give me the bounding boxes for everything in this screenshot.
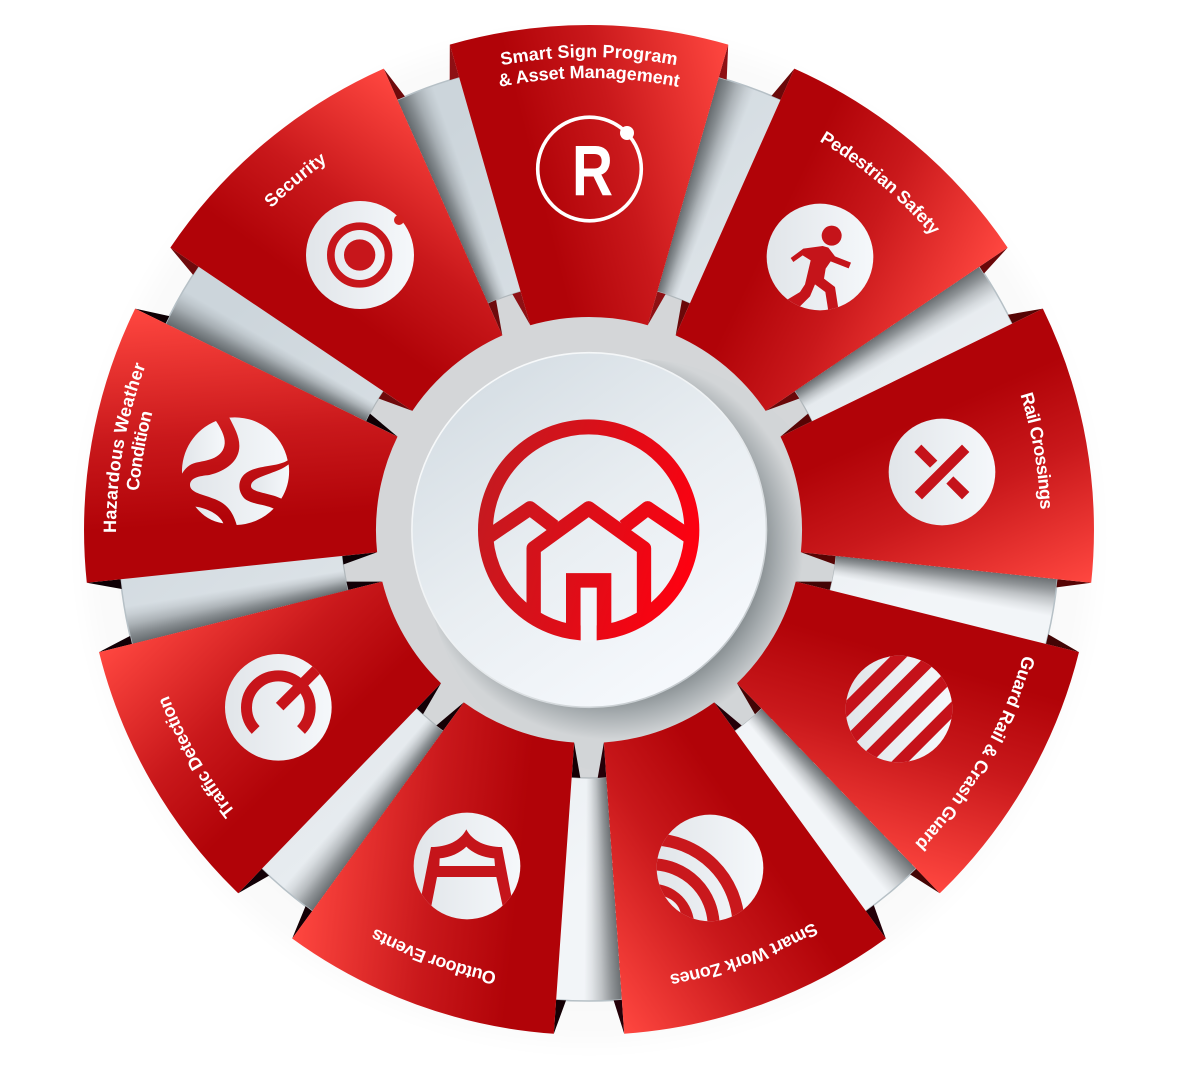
panel: Guard Rail & Crash Guard: Guard Rail & Crash Guard	[915, 657, 1034, 852]
panel: Security: Security	[265, 154, 325, 206]
centre disc	[412, 353, 766, 707]
panel: Rail Crossings: Rail Crossings	[1020, 392, 1051, 509]
icon: traffic gauge	[225, 654, 332, 761]
panel: Smart Work Zones: Smart Work Zones	[670, 924, 818, 984]
icon: hazardous weather winding road	[182, 417, 289, 525]
panel: Security	[170, 68, 502, 411]
panel: Outdoor Events: Outdoor Events	[372, 930, 495, 984]
panel: Smart Work Zones	[598, 702, 886, 1034]
icon: registered R sign: R	[572, 131, 613, 210]
panel: Rail Crossings	[780, 308, 1094, 588]
grey hub with spokes	[118, 59, 1060, 1001]
panel: Outdoor Events	[292, 702, 580, 1034]
icon: rail crossing	[889, 419, 995, 525]
panel: Pedestrian Safety: Pedestrian Safety	[820, 131, 940, 234]
panel: Pedestrian Safety	[676, 68, 1008, 411]
icon: registered R sign	[538, 117, 641, 221]
icon: pedestrian	[767, 204, 873, 311]
icon: guard rail stripes	[846, 656, 952, 762]
panel: Guard Rail & Crash Guard	[737, 582, 1079, 894]
folded grey strips between panels	[118, 59, 1060, 1001]
panel: Hazardous Weather Condition: Hazardous Weather	[104, 362, 144, 532]
panel: Hazardous Weather Condition: Condition	[126, 412, 152, 490]
centre disc drop shadow	[435, 360, 834, 736]
panel: Smart Sign Program & Asset Management: & Asset Management	[500, 66, 680, 87]
panel: Traffic Detection: Traffic Detection	[160, 696, 233, 820]
icon: work zone signal arcs	[656, 814, 764, 922]
icon: security target	[306, 201, 414, 309]
panel: Traffic Detection	[99, 582, 441, 894]
icon: event tent	[414, 813, 520, 919]
panel: Smart Sign Program & Asset Management	[450, 25, 728, 326]
panel: Hazardous Weather Condition	[84, 308, 398, 589]
centre logo: houses in a circle	[485, 427, 692, 643]
panel: Smart Sign Program & Asset Management: Smart Sign Program	[501, 44, 676, 65]
